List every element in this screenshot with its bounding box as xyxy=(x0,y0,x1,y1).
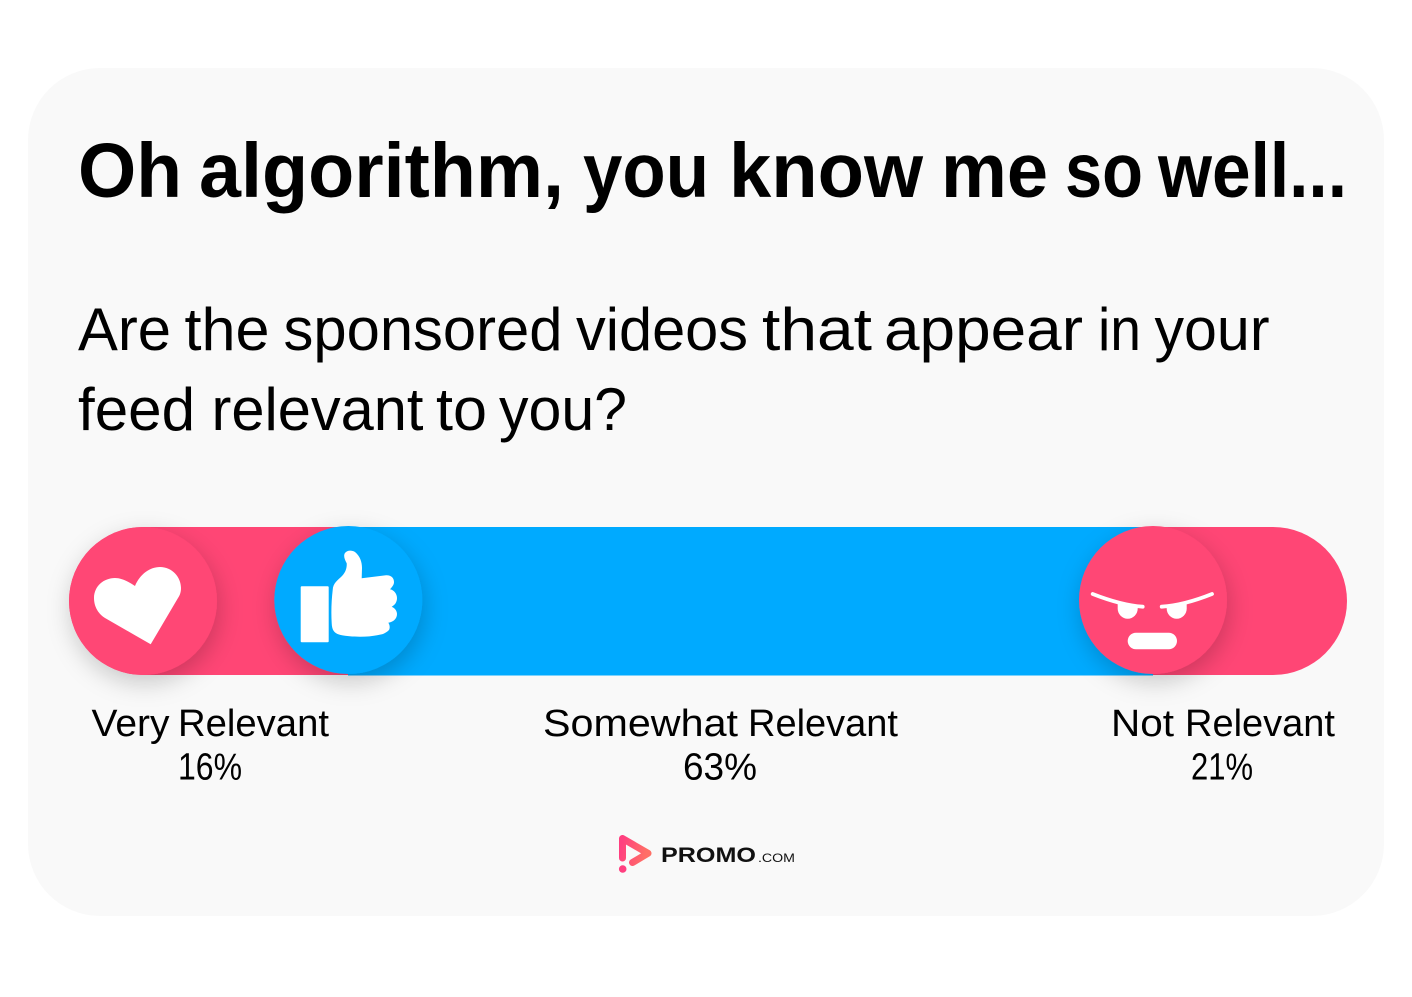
subtitle question: to xyxy=(436,376,487,443)
title: so xyxy=(1065,128,1143,214)
subtitle question: relevant xyxy=(212,376,424,443)
bar segment: very relevant 16% and not relevant 21% xyxy=(69,527,1347,675)
subtitle question: the xyxy=(184,296,270,363)
label: very relevant: 16% xyxy=(178,746,242,788)
logo wordmark xyxy=(661,844,795,867)
icon: play mark xyxy=(619,838,648,873)
label: very relevant: Very xyxy=(92,703,170,745)
label: not relevant: Not xyxy=(1111,703,1174,745)
title: know xyxy=(729,128,924,214)
subtitle question: videos xyxy=(576,296,748,363)
label: not relevant: Relevant xyxy=(1185,703,1335,745)
subtitle question: Are xyxy=(78,296,171,363)
label: somewhat relevant: Relevant xyxy=(748,703,898,745)
title: well... xyxy=(1157,128,1347,214)
chart: relevance stacked bar xyxy=(69,526,1347,676)
subtitle question: appear xyxy=(884,296,1083,363)
logo: promo.com xyxy=(619,838,795,873)
subtitle question: feed xyxy=(78,376,195,443)
label: very relevant: Relevant xyxy=(178,703,329,745)
icon: thumbs up badge xyxy=(274,526,422,674)
subtitle question: in xyxy=(1098,296,1141,363)
label: somewhat relevant: 63% xyxy=(683,746,757,788)
icon: heart badge xyxy=(69,527,217,675)
subtitle question: sponsored xyxy=(284,296,562,363)
label: somewhat relevant: Somewhat xyxy=(543,703,738,745)
bar segment: somewhat relevant 63% xyxy=(348,527,1153,676)
title: Oh xyxy=(78,128,182,214)
label: somewhat relevant xyxy=(543,703,898,788)
title: you xyxy=(583,128,709,214)
subtitle question: that xyxy=(762,296,872,363)
title: me xyxy=(941,128,1048,214)
subtitle question: you? xyxy=(499,376,627,443)
label: very relevant xyxy=(92,703,329,788)
title: algorithm, xyxy=(199,128,564,214)
logo wordmark: PROMO xyxy=(661,844,756,867)
label: not relevant xyxy=(1111,703,1335,788)
subtitle question xyxy=(78,296,1270,443)
subtitle question: your xyxy=(1154,296,1270,363)
icon: angry face badge xyxy=(1079,526,1227,674)
logo wordmark: .COM xyxy=(758,851,795,865)
label: not relevant: 21% xyxy=(1191,746,1253,788)
title xyxy=(78,128,1347,214)
